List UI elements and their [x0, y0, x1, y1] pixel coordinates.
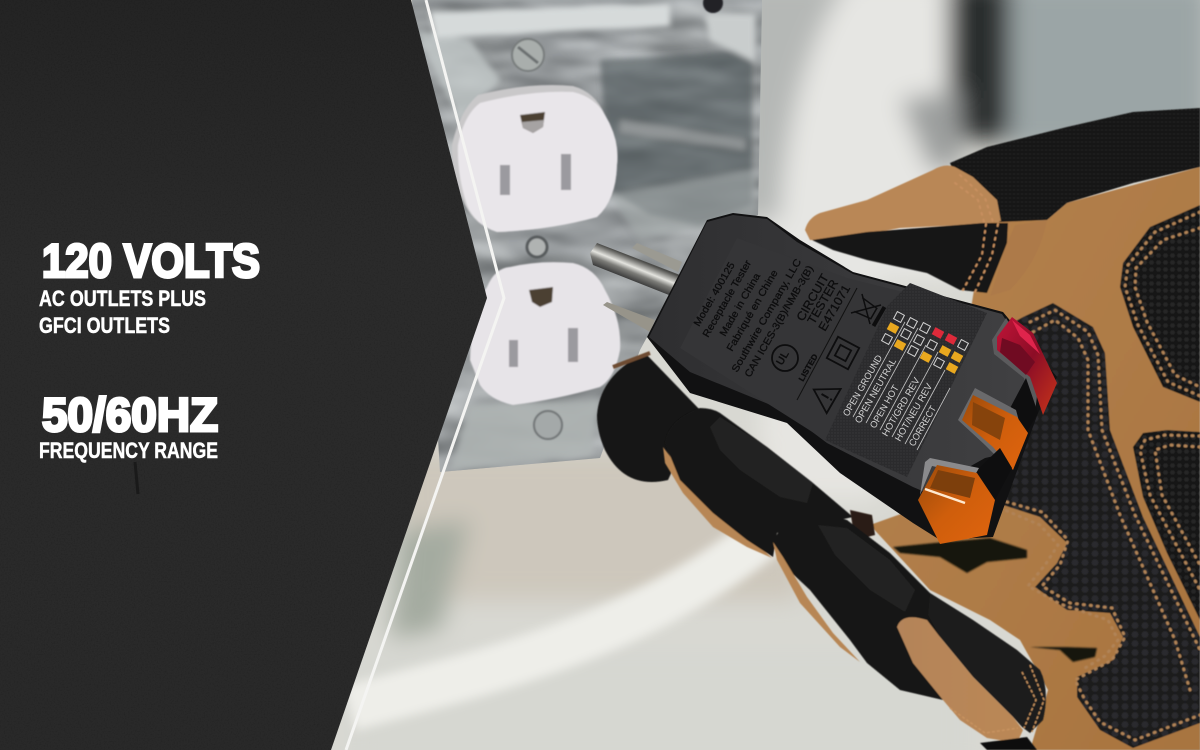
black band between lenses: [1008, 378, 1038, 440]
middle finger: [663, 408, 853, 558]
palm creases: [893, 538, 1097, 662]
little finger: [897, 593, 1046, 750]
description: [39, 286, 206, 338]
glove palm, tan: [870, 167, 1200, 750]
UL mark: [772, 345, 798, 371]
description: AC OUTLETS PLUS: [39, 286, 206, 311]
upper right pad: [1120, 205, 1200, 402]
status labels: [841, 353, 939, 448]
black band lower: [975, 448, 1012, 500]
label panel: [680, 238, 987, 477]
speckled indicator panel: [825, 283, 987, 477]
divider lines: [797, 288, 857, 400]
lower outlet: [470, 262, 620, 405]
engraved text: Model: 400125: [692, 260, 738, 328]
spec: 120 volts: [39, 234, 260, 338]
thumb tip: [597, 353, 700, 482]
engraved text: Receptacle Tester: [701, 258, 754, 340]
upper outlet: [452, 85, 618, 232]
status labels: OPEN GROUND: [841, 353, 885, 418]
plug prongs: [590, 243, 682, 332]
status labels: HOT/NEU REV: [893, 381, 935, 444]
circuit tester: [647, 213, 1057, 544]
double square symbol: [827, 337, 859, 369]
engraved text: [692, 257, 853, 383]
lower right pad: [1133, 430, 1200, 620]
engraved text: TESTER: [804, 277, 841, 326]
metal junction box: [400, 0, 770, 480]
red lens: [992, 317, 1057, 415]
description: GFCI OUTLETS: [39, 313, 170, 338]
engraved text: Fabriqué en Chine: [725, 268, 781, 354]
lower orange lens: [918, 458, 995, 544]
centre pad stitching: [1000, 310, 1200, 740]
dark chevron panel: [0, 0, 490, 750]
indicator grid: [882, 312, 968, 374]
middle orange lens: [958, 388, 1028, 470]
status labels: OPEN HOT: [868, 383, 902, 430]
status labels: HOT/GRD REV: [880, 375, 923, 438]
heading: 120 VOLTS: [42, 234, 260, 287]
status labels: OPEN NEUTRAL: [853, 357, 899, 426]
white chevron line: [346, 0, 504, 750]
gripping fingers: [663, 408, 1046, 750]
tester top face: [649, 215, 1040, 492]
engraved text: LISTED: [797, 352, 820, 383]
tan fold below index: [990, 220, 1047, 296]
engraved text: Southwire Company, LLC: [730, 257, 804, 374]
warning triangle: [807, 377, 841, 413]
tester body: [647, 213, 1057, 540]
thumb stitch: [613, 353, 650, 367]
engraved text: CAN ICES-3(B)/NMB-3(B): [743, 264, 816, 380]
engraved text: E471071: [815, 282, 853, 334]
spec: frequency: [39, 388, 218, 463]
heading: 50/60HZ: [42, 388, 218, 441]
lower pad stitching: [1140, 435, 1200, 590]
palm shadow near lens: [850, 510, 875, 540]
back of hand, black knit: [950, 108, 1200, 222]
engraved text: Made in China: [718, 271, 763, 338]
upper pad stitching: [1125, 212, 1200, 396]
ring finger: [773, 510, 943, 700]
status labels: CORRECT: [907, 404, 939, 448]
screws: [512, 0, 723, 439]
work glove hand: [597, 108, 1200, 750]
centre palm pad: [997, 303, 1200, 748]
outlets: [452, 85, 620, 405]
UL mark: UL: [774, 349, 792, 368]
description: FREQUENCY RANGE: [39, 438, 218, 463]
recycling bin symbol: [851, 294, 884, 326]
index finger: [805, 166, 1008, 293]
engraved text: CIRCUIT: [793, 271, 832, 324]
